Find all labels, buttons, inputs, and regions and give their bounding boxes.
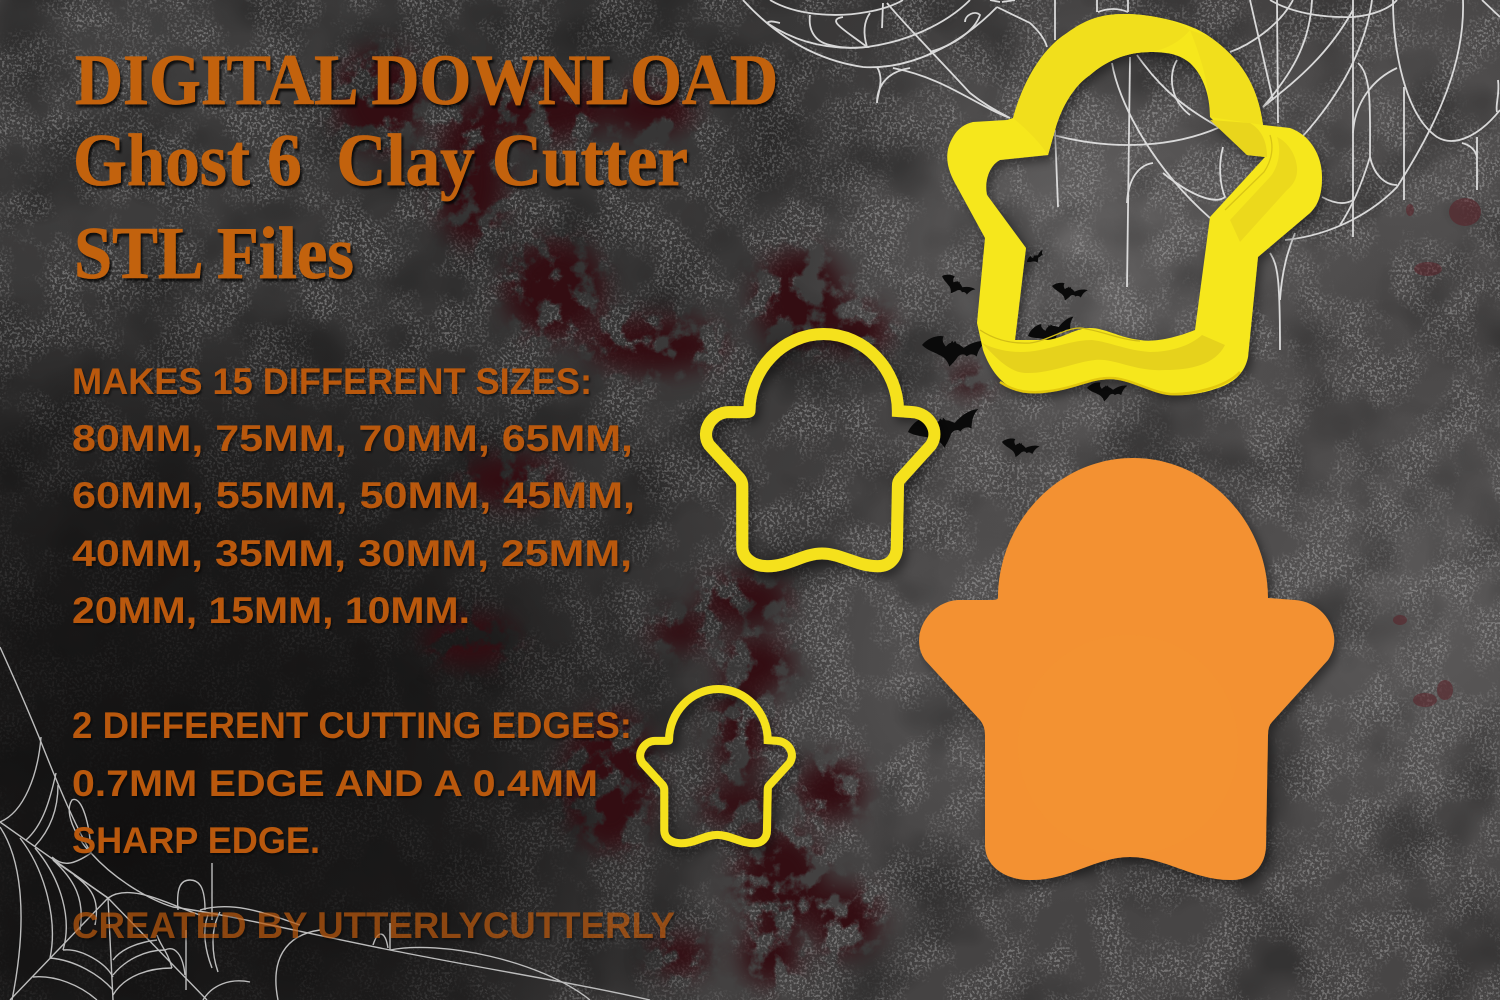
cutter right dome wall — [1190, 30, 1263, 125]
text block: sizes: 60MM, 55MM, 50MM, 45MM, — [72, 475, 635, 516]
medium yellow cutter outline — [706, 334, 934, 566]
cutter right arm lip — [1230, 137, 1297, 242]
text block: cutting edges — [72, 705, 632, 861]
text block: sizes: 40MM, 35MM, 30MM, 25MM, — [72, 533, 632, 574]
cutter top band inner wall — [1013, 14, 1190, 155]
spider web: top — [743, 0, 1500, 350]
orange clay ghost — [919, 458, 1334, 880]
credit line: CREATED BY UTTERLYCUTTERLY — [72, 905, 675, 946]
cutter bottom lip wall — [982, 335, 1225, 373]
text block: sizes: MAKES 15 DIFFERENT SIZES: — [72, 361, 592, 402]
text block: sizes — [72, 361, 635, 631]
heading: digital download: DIGITAL DOWNLOAD — [75, 40, 778, 120]
bats flock — [905, 248, 1128, 461]
heading: STL files: STL Files — [74, 213, 354, 295]
spider web: bottom left — [0, 647, 650, 1000]
title block — [73, 40, 778, 295]
text block: sizes: 80MM, 75MM, 70MM, 65MM, — [72, 418, 633, 459]
text block: cutting edges: SHARP EDGE. — [72, 820, 320, 861]
heading: product name: Ghost 6 Clay Cutter — [73, 120, 688, 202]
large 3D yellow cutter — [947, 14, 1322, 395]
blood specks right — [1393, 198, 1481, 707]
cutter bottom shaded edge — [1000, 372, 1240, 394]
cutter outer body — [947, 14, 1322, 395]
cutter right arm wall — [1210, 120, 1267, 157]
text block: cutting edges: 2 DIFFERENT CUTTING EDGES: — [72, 705, 632, 746]
blood stains — [335, 50, 988, 985]
small yellow cutter outline — [640, 689, 792, 843]
text block: cutting edges: 0.7MM EDGE AND A 0.4MM — [72, 763, 598, 804]
subtle inner shading — [1018, 635, 1238, 855]
text block: sizes: 20MM, 15MM, 10MM. — [72, 590, 470, 631]
